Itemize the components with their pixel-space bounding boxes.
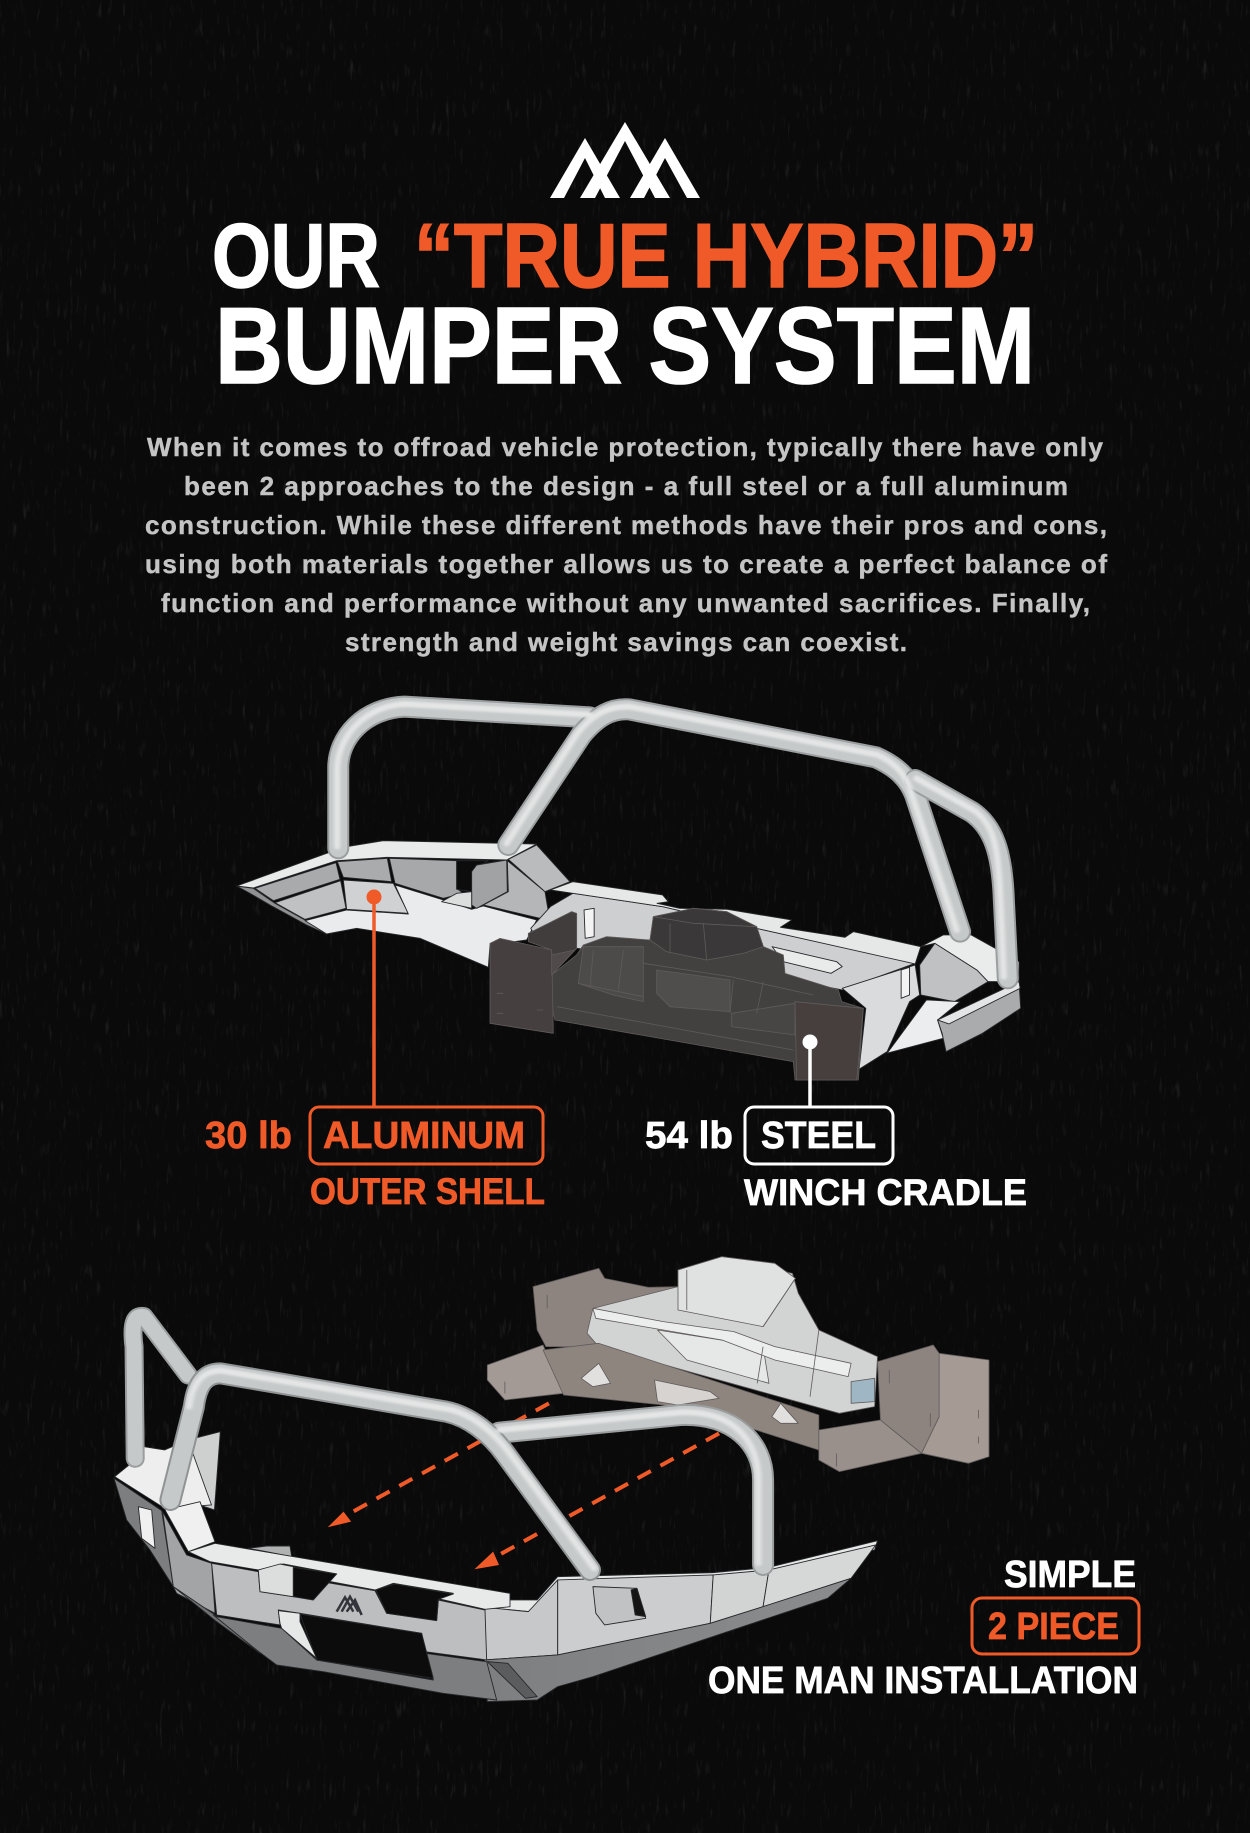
label: steel winch cradle: WINCH CRADLE xyxy=(744,1172,1027,1213)
bumper logo mark xyxy=(337,1597,362,1615)
callout: steel leader line xyxy=(802,1034,818,1106)
label: aluminum outer shell: 30 lb xyxy=(205,1115,292,1157)
intro paragraph: been 2 approaches to the design - a full steel or a full aluminum xyxy=(184,471,1068,501)
intro paragraph: function and performance without any unwanted sacrifices. Finally, xyxy=(161,588,1090,618)
label: aluminum outer shell: OUTER SHELL xyxy=(310,1171,545,1212)
label: aluminum outer shell: ALUMINUM xyxy=(323,1115,525,1157)
aluminum shell: center and right side xyxy=(531,882,1021,1069)
callout: aluminum leader line xyxy=(366,890,382,1106)
winch cradle assembly xyxy=(487,1257,989,1472)
label: steel winch cradle: 54 lb xyxy=(645,1115,733,1157)
icon: mountain logo xyxy=(550,122,700,198)
bumper diagram: two piece exploded view xyxy=(114,1257,989,1702)
bumper tube hoop xyxy=(337,704,1008,978)
label: steel winch cradle: STEEL xyxy=(761,1115,876,1157)
label: simple 2 piece installation: 2 PIECE xyxy=(988,1606,1119,1648)
intro paragraph: construction. While these different methods have their pros and cons, xyxy=(145,510,1107,540)
intro paragraph: strength and weight savings can coexist. xyxy=(345,627,907,657)
front bumper tubes xyxy=(133,1316,763,1570)
title: “TRUE HYBRID” xyxy=(414,206,1038,307)
dashed arrow: left xyxy=(328,1403,549,1527)
label: steel winch cradle xyxy=(645,1107,1027,1213)
front bumper shell: left and right ends xyxy=(115,1432,878,1702)
label: simple 2 piece installation: SIMPLE xyxy=(1004,1554,1136,1596)
steel winch cradle and winch xyxy=(490,908,863,1080)
intro paragraph: When it comes to offroad vehicle protection, typically there have only xyxy=(147,432,1104,462)
intro paragraph xyxy=(145,432,1107,657)
title: BUMPER SYSTEM xyxy=(215,285,1035,407)
bumper diagram: hybrid bumper with winch cradle xyxy=(237,704,1021,1080)
aluminum shell: left wing xyxy=(237,841,570,967)
dashed arrow: right xyxy=(474,1433,719,1569)
label: simple 2 piece installation xyxy=(708,1554,1139,1702)
intro paragraph: using both materials together allows us to create a perfect balance of xyxy=(145,549,1107,579)
front bumper shell: main face xyxy=(114,1478,510,1700)
label: aluminum outer shell xyxy=(205,1107,545,1212)
title xyxy=(212,206,1038,407)
title: OUR xyxy=(212,206,380,307)
label: simple 2 piece installation: ONE MAN INSTALLATION xyxy=(708,1660,1138,1702)
